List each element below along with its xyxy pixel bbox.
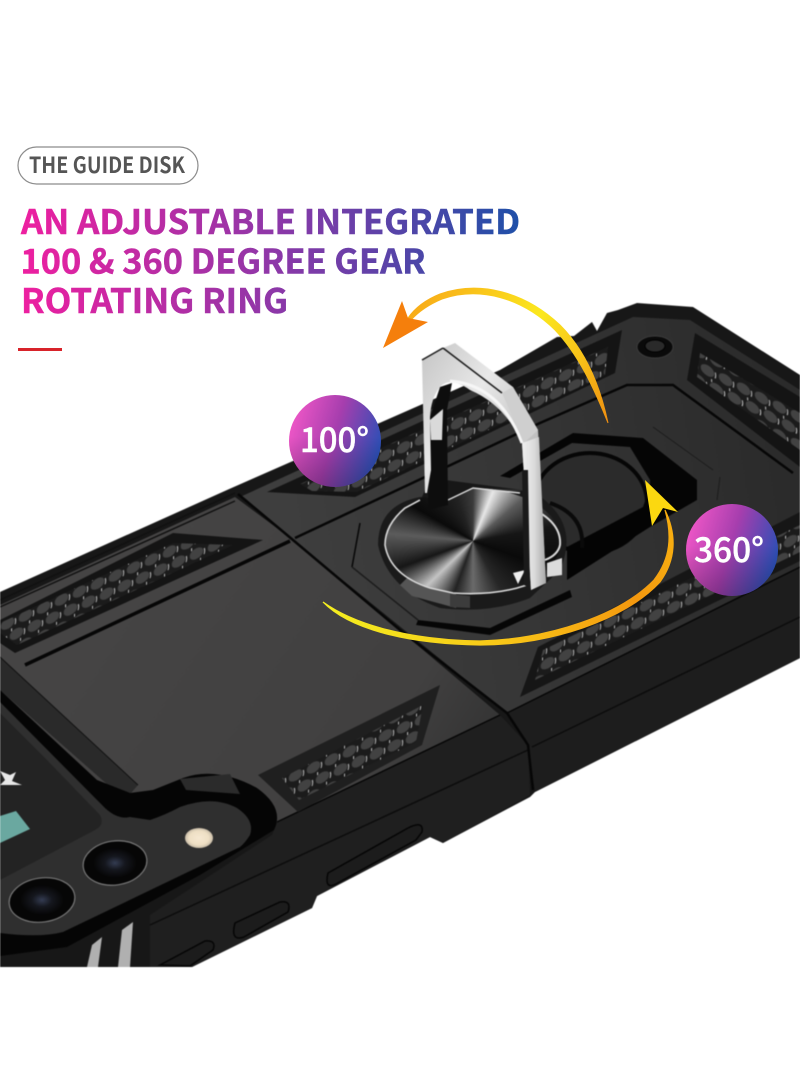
octagon lower black edge — [416, 590, 572, 635]
camera shoulder — [0, 657, 138, 800]
arrow head — [383, 301, 428, 348]
title heading — [20, 195, 520, 323]
top rim band — [0, 493, 235, 607]
grille lower-centre — [258, 685, 440, 812]
corner screw — [637, 336, 673, 358]
right side wall — [507, 567, 800, 792]
side buttons — [160, 825, 422, 966]
title heading: AN ADJUSTABLE INTEGRATED — [20, 195, 520, 244]
disc rim highlight — [385, 500, 527, 594]
silver side stripes — [87, 922, 133, 967]
silver ring — [422, 343, 546, 590]
ring body — [422, 343, 546, 590]
screen window — [0, 713, 102, 880]
grille lower-right — [520, 512, 800, 697]
arrow: 100 degree — [383, 288, 608, 423]
disc dark upper edge — [422, 478, 522, 500]
left side wall — [150, 715, 530, 967]
flash — [185, 828, 213, 848]
case silhouette — [0, 303, 800, 967]
grille top-centre — [267, 330, 622, 497]
title heading: 100 & 360 DEGREE GEAR — [20, 234, 426, 284]
ring hole shadow — [428, 383, 452, 510]
recess chamfer — [180, 774, 240, 794]
badge: 360 degrees: 360° — [694, 523, 764, 572]
arrow: 360 degree — [323, 480, 678, 645]
right piece face — [240, 317, 800, 713]
camera recess outline — [0, 690, 277, 956]
camera island — [0, 702, 251, 935]
grille top-right — [687, 333, 800, 467]
phone case — [0, 303, 800, 967]
arrow head — [645, 480, 678, 526]
left piece face — [0, 497, 500, 947]
octagon black band — [500, 433, 697, 527]
red accent line — [18, 348, 62, 351]
badge: 360 degrees — [686, 504, 778, 596]
ring right leg — [522, 437, 546, 590]
badge: 100 degrees — [289, 395, 381, 487]
ring disc base — [378, 478, 567, 610]
badge: 100 degrees: 100° — [300, 413, 369, 462]
ring disc brushed metal — [385, 488, 561, 594]
camera lenses — [6, 837, 150, 926]
screen wallpaper patch — [0, 811, 30, 843]
grille top-left — [0, 533, 263, 653]
rotating seat — [533, 453, 650, 580]
label pill: the guide disk: THE GUIDE DISK — [29, 148, 186, 180]
title heading: ROTATING RING — [21, 274, 288, 323]
screen play icon — [0, 771, 22, 785]
body slits and hinge — [25, 385, 800, 822]
disc notch — [513, 570, 525, 584]
